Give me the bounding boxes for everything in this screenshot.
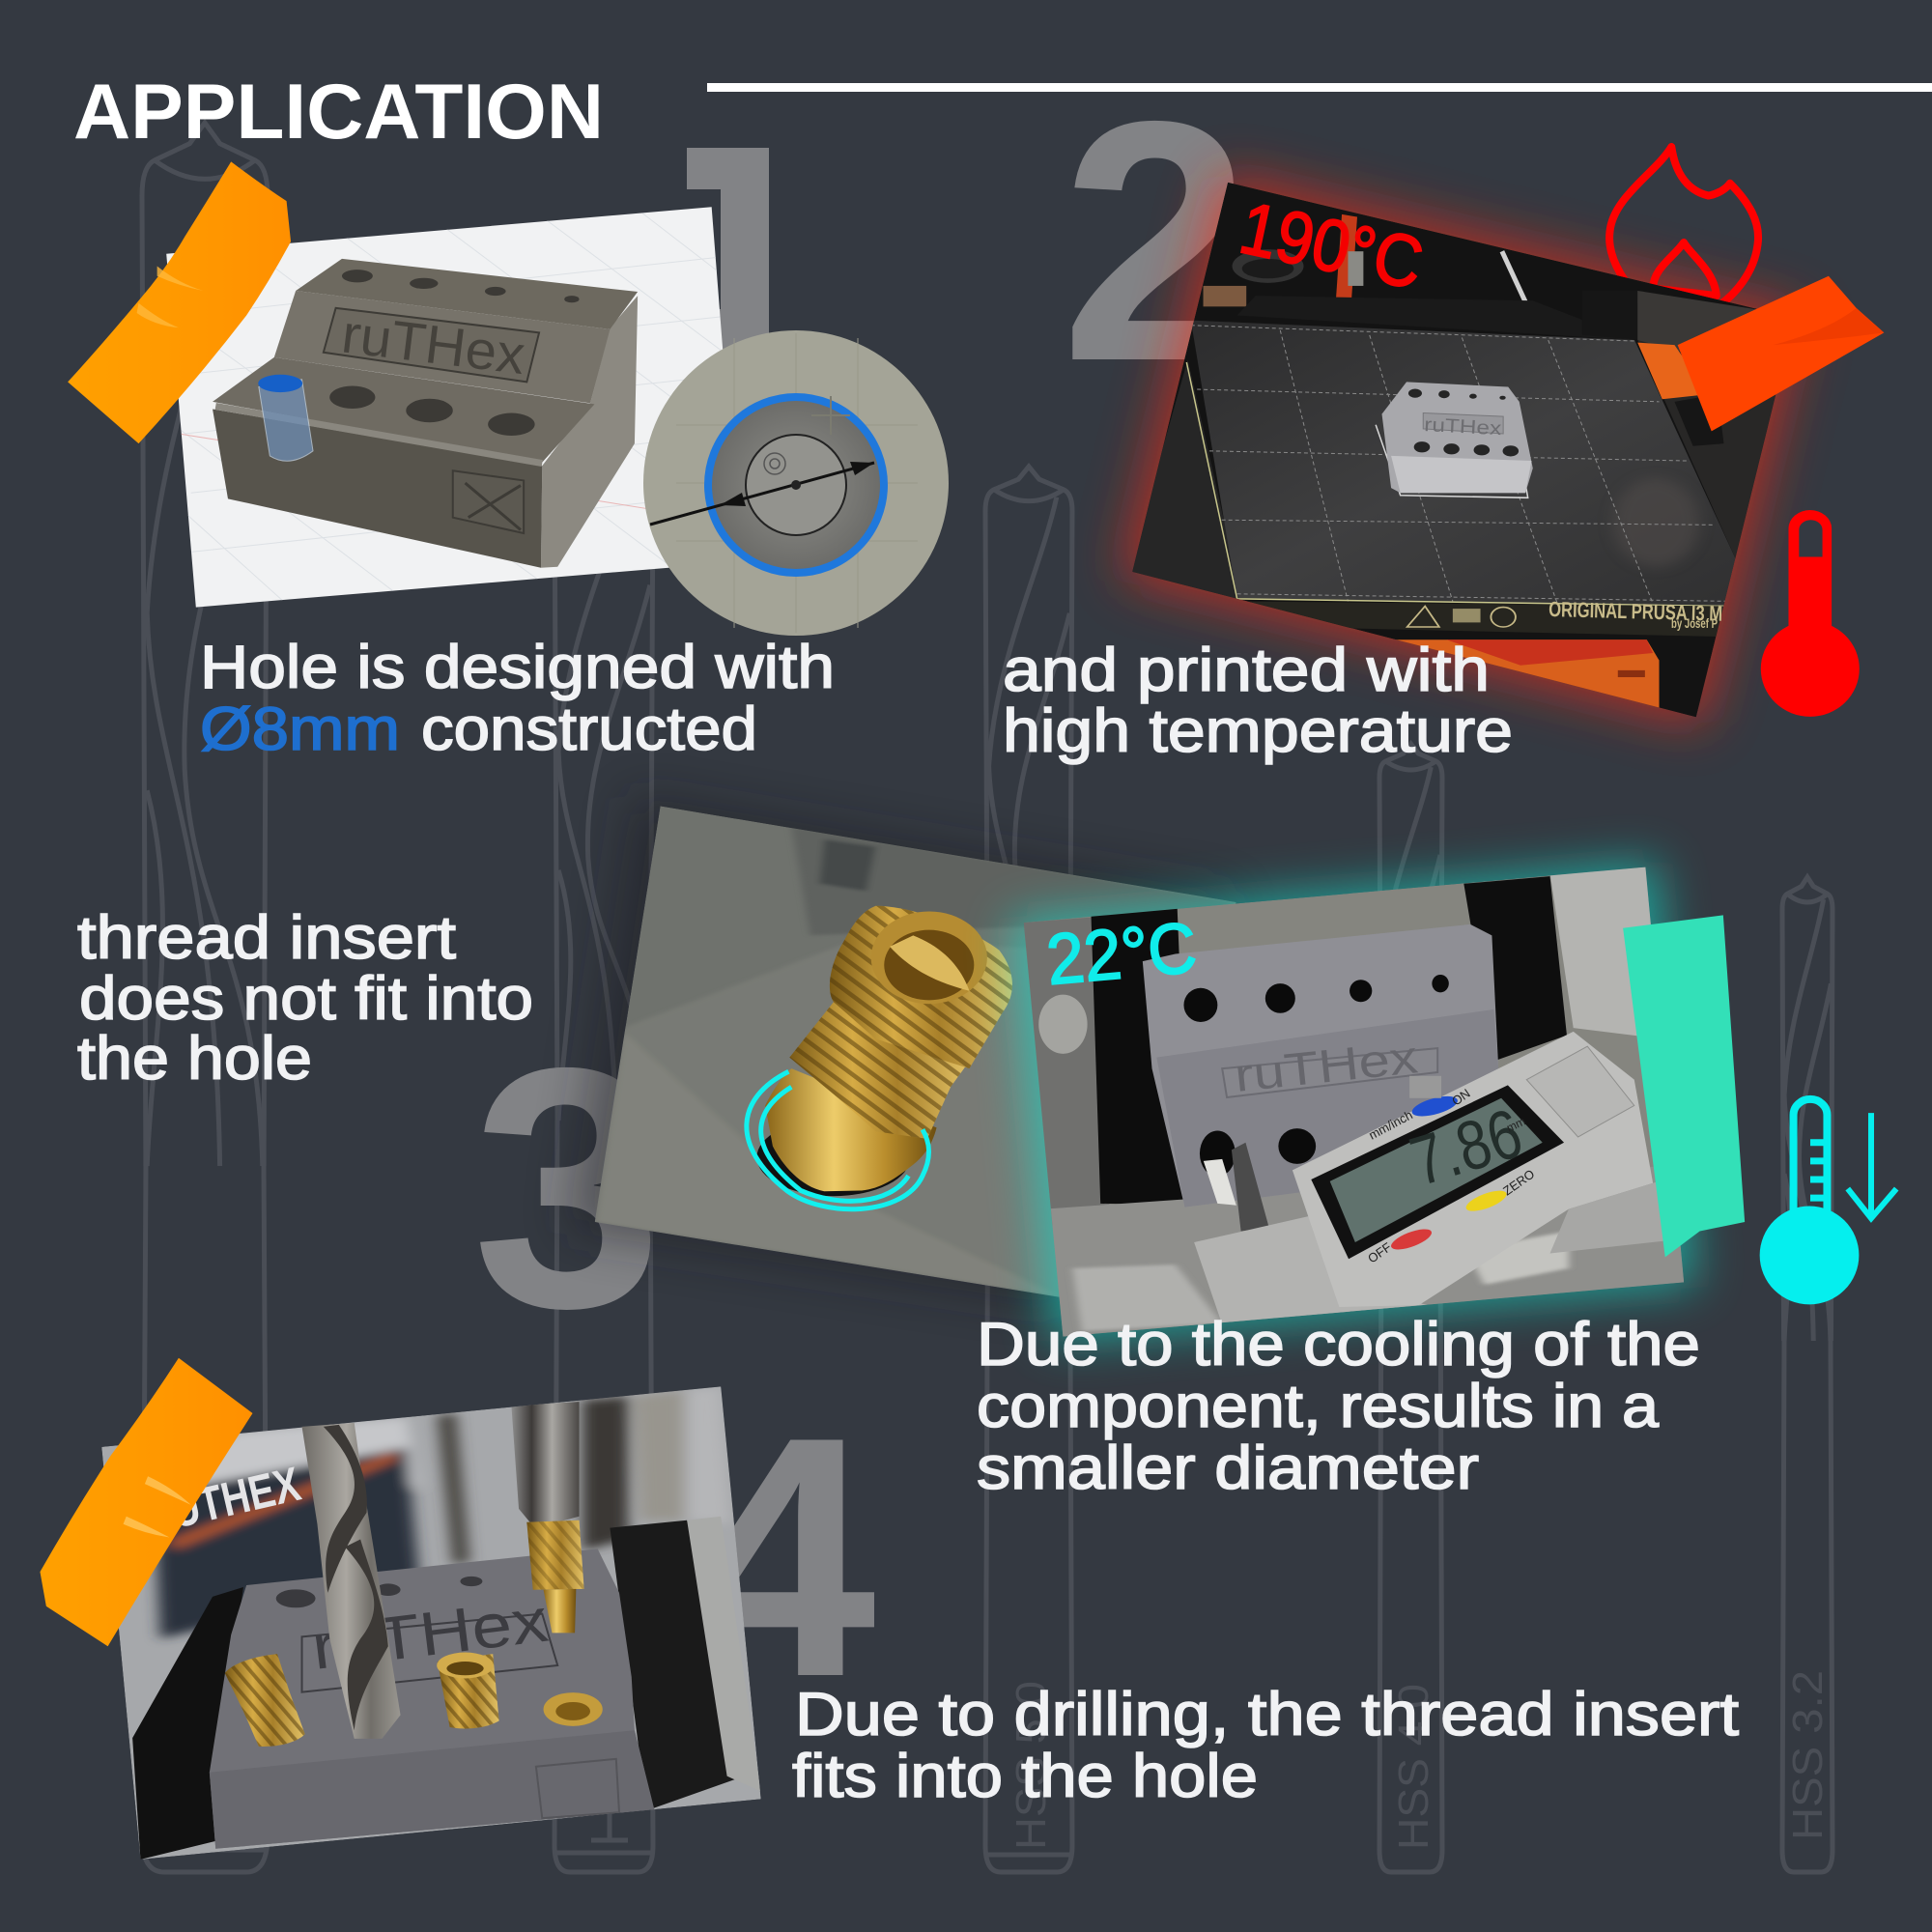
brass insert middle	[437, 1653, 499, 1728]
orange base	[1391, 639, 1660, 710]
CAD grid	[173, 212, 736, 601]
caliper reading: ZERO	[1500, 1166, 1537, 1198]
drill bit label: HSS 5: HSS 5.0	[1008, 1681, 1055, 1850]
temperature label 190°C: 190°C	[1233, 186, 1430, 305]
text: step 3 result caption: smaller diameter	[977, 1435, 1479, 1502]
clamps	[132, 1587, 243, 1860]
printed part	[1376, 425, 1528, 497]
photo lettering: ORIGINAL PRUSA I3 M	[1548, 597, 1722, 626]
tape: red-orange	[1678, 276, 1884, 431]
text: step 4 caption	[792, 1681, 1740, 1810]
panel: step 4 drilling	[40, 1358, 761, 1860]
text: step 4 caption: Due to drilling, the thread insert	[795, 1681, 1740, 1748]
title: APPLICATION	[73, 69, 604, 156]
step number 3: 3	[472, 998, 663, 1379]
drill bit label: HSS 4.0: HSS 4.0	[1390, 1684, 1437, 1850]
red glow	[1132, 183, 1795, 717]
panel: step 2 printing	[1126, 147, 1884, 717]
text: step 3 problem caption: the hole	[77, 1025, 312, 1093]
inset: diameter detail	[643, 330, 949, 636]
panel: step 1 CAD design	[68, 161, 949, 636]
logo frame	[324, 308, 539, 382]
caliper reading: mm/inch	[1366, 1107, 1415, 1143]
drill bit outline 2	[554, 425, 653, 1872]
drill bit outline 1	[142, 123, 268, 1872]
X logo frame	[453, 470, 524, 533]
printer photo	[1126, 183, 1795, 717]
text: step 1 caption	[200, 634, 835, 763]
text: step 3 problem caption: does not fit into	[79, 965, 533, 1033]
text: step 2 caption: and printed with	[1003, 637, 1490, 704]
text: step 3 result caption: component, results in a	[977, 1373, 1660, 1440]
brass insert seated	[544, 1692, 603, 1726]
caliper reading	[1365, 1086, 1537, 1265]
drill bit outline 3	[985, 467, 1072, 1872]
caliper reading: 7.86	[1402, 1094, 1531, 1201]
printer parts	[1233, 249, 1304, 283]
step number 2: 2	[1061, 51, 1251, 433]
block: right side	[541, 296, 638, 568]
photo lettering: logo: ruTHex	[1233, 1032, 1420, 1102]
photo lettering	[1424, 414, 1722, 631]
drill bit outline 4	[1379, 744, 1442, 1872]
highlighted hole cylinder	[259, 380, 313, 461]
text: step 2 caption	[1003, 637, 1513, 765]
caliper buttons	[1412, 1095, 1458, 1117]
text: step 1 caption: Ø8mm	[200, 696, 400, 763]
text: step 3 problem caption: thread insert	[77, 904, 457, 972]
text: step 3 result caption	[977, 1311, 1700, 1502]
jaw tip	[1204, 1159, 1236, 1206]
photo lettering: ruTHex	[308, 1585, 552, 1683]
drill bit label: HSS 3.2: HSS 3.2	[1784, 1670, 1832, 1840]
photo lettering	[166, 1457, 552, 1683]
drilled hole	[757, 1135, 906, 1196]
block: ledge rounded edge	[215, 406, 542, 464]
block: lower ledge	[213, 357, 594, 463]
photo lettering: ruTHex	[1424, 414, 1502, 440]
text: step 1 caption: constructed	[421, 696, 757, 763]
step number 1: 1	[639, 81, 830, 463]
icon: cold thermometer with down arrow	[1760, 1099, 1896, 1304]
grey block	[210, 1548, 654, 1849]
teal glow	[1024, 867, 1684, 1337]
photo lettering: by Josef P	[1671, 615, 1718, 631]
caliper reading: OFF	[1365, 1239, 1394, 1265]
temperature label 22°C: 22°C	[1043, 907, 1200, 1000]
step number 4: 4	[686, 1367, 878, 1748]
caliper reading: ON	[1449, 1086, 1473, 1108]
caliper photo	[1024, 866, 1690, 1342]
print bed	[1191, 321, 1739, 607]
text: step 2 caption: high temperature	[1003, 697, 1513, 765]
caliper reading: mm	[1504, 1115, 1527, 1135]
text: step 4 caption: fits into the hole	[792, 1743, 1258, 1810]
title rule	[707, 83, 1932, 92]
brass insert left	[225, 1654, 305, 1747]
cyan fit rings	[747, 1071, 929, 1209]
tape: orange	[68, 161, 291, 443]
text: step 3 problem caption	[77, 904, 533, 1093]
bed label strip	[1237, 601, 1730, 637]
photo lettering: UTHEX	[166, 1457, 305, 1539]
block: logo face	[274, 291, 610, 403]
panel: step 3 insert and caliper	[567, 795, 1896, 1342]
drilling photo	[101, 1386, 761, 1860]
gold insert on soldering tip	[526, 1520, 584, 1633]
bracket	[1637, 342, 1698, 400]
twist drill	[302, 1423, 401, 1739]
insert photo shadow	[567, 795, 1236, 1305]
tape: orange	[40, 1358, 252, 1646]
CAD viewport sheet	[166, 207, 739, 608]
text: step 3 result caption: Due to the cooling of the	[977, 1311, 1700, 1378]
block: front face	[213, 409, 542, 568]
icon: flame	[1609, 147, 1758, 310]
spindle	[511, 1402, 580, 1522]
text: step 1 caption: Hole is designed with	[200, 634, 835, 701]
caliper	[1194, 1216, 1428, 1323]
bed grid	[1191, 326, 1733, 604]
drill bit outline 5	[1782, 877, 1833, 1872]
block: top face	[296, 259, 638, 329]
blurred background	[124, 1386, 730, 1638]
icon: hot thermometer	[1761, 510, 1860, 717]
insert photo	[595, 806, 1236, 1297]
block: top holes	[329, 270, 580, 436]
grey printed block	[1143, 924, 1498, 1208]
speckled table	[1126, 359, 1243, 607]
tape: teal	[1623, 915, 1745, 1257]
brass insert	[765, 906, 1012, 1191]
logo lettering: ruTHex	[339, 302, 528, 385]
